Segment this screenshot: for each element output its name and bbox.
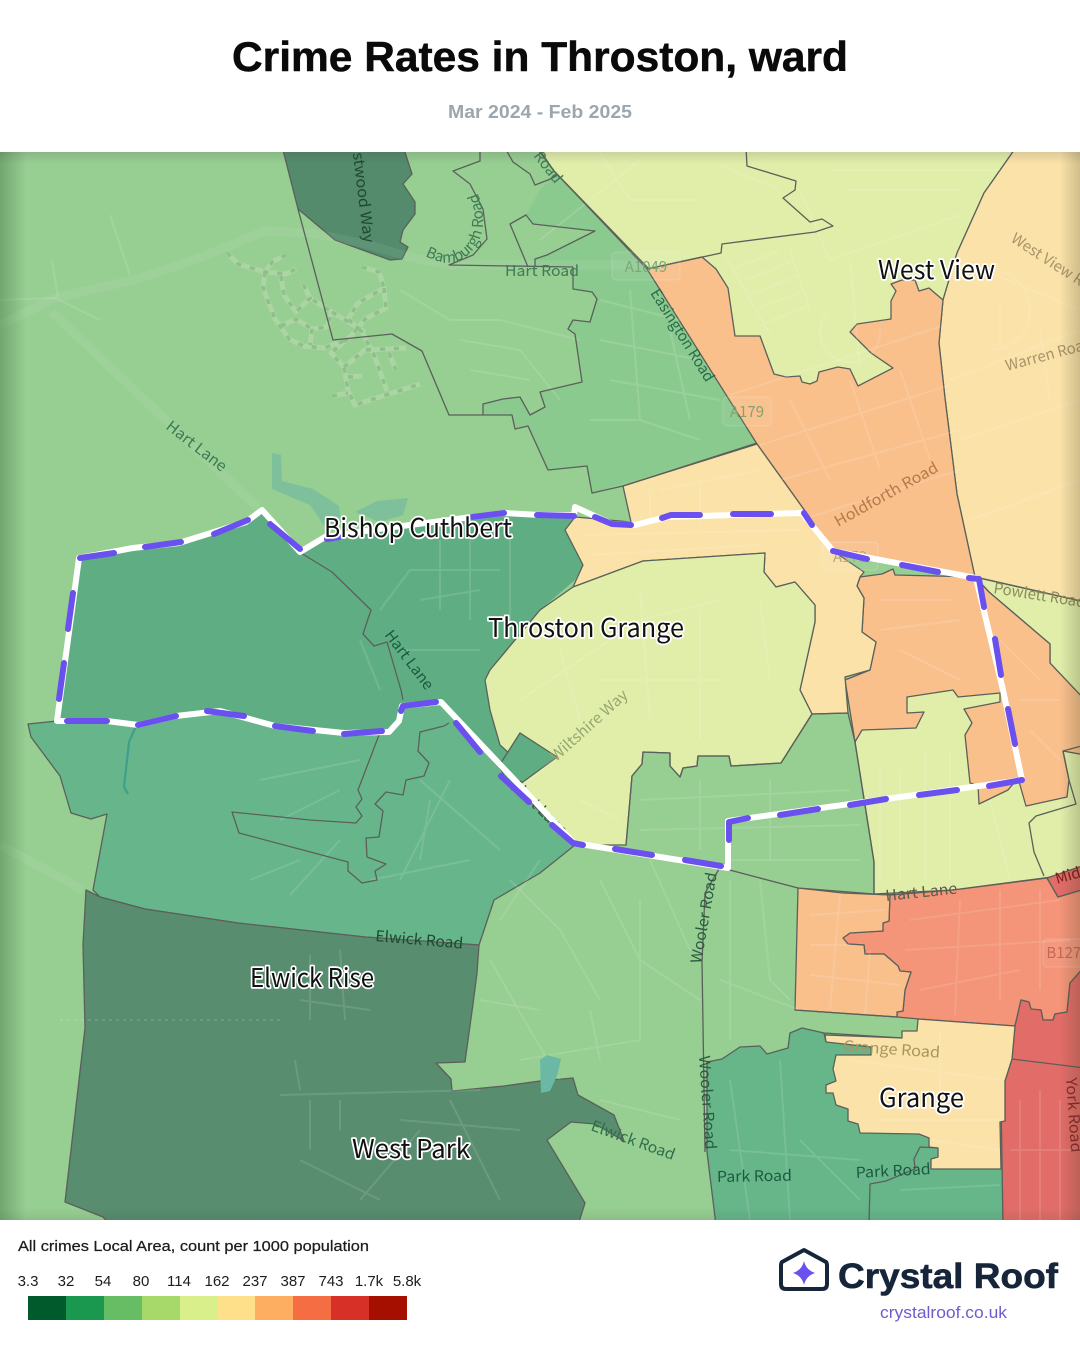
label: Road top: Road <box>529 146 568 187</box>
place: West View: West View <box>878 250 995 287</box>
label: Grange Road: Grange Road <box>843 1035 941 1063</box>
subtitle: date range: Mar 2024 - Feb 2025 <box>448 102 632 122</box>
legend title: All crimes Local Area, count per 1000 population <box>18 1238 369 1255</box>
boundary purple dashes <box>59 513 1022 866</box>
shield A179 north: A179 <box>730 401 764 422</box>
map edge vignette <box>0 152 1080 1220</box>
label: Hart Lane hidden by boundary: Hart Lane <box>508 776 573 840</box>
legend scale values: 1.7k <box>355 1273 384 1290</box>
shield A179 south: A179 <box>833 546 867 567</box>
title: Crime Rates in Throston, ward <box>232 33 848 80</box>
place: Bishop Cuthbert: Bishop Cuthbert <box>324 508 512 545</box>
selected ward boundary: Throston <box>57 507 1022 868</box>
road network <box>0 152 1080 1220</box>
label: Park Road west: Park Road <box>717 1165 792 1187</box>
legend scale values: 387 <box>280 1273 306 1290</box>
legend scale values <box>18 1273 422 1290</box>
place: Grange: Grange <box>879 1078 964 1115</box>
road shields <box>612 252 1080 967</box>
legend <box>18 1238 422 1320</box>
label: Hart Lane ward: Hart Lane <box>380 625 439 694</box>
map base: light green area <box>0 152 948 1220</box>
label: Bamburgh Road: Bamburgh Road <box>426 194 484 263</box>
estate road dashes <box>227 253 420 405</box>
label: Hart Lane east: Hart Lane <box>884 878 958 906</box>
boundary white casing <box>57 507 1022 868</box>
road labels <box>166 152 1080 1182</box>
shield A179 north <box>723 397 771 426</box>
shield A1049 <box>612 252 680 280</box>
shield A1049: A1049 <box>625 256 667 277</box>
second pond <box>355 498 408 522</box>
icon: house with star <box>781 1250 827 1289</box>
crime rate area polygons <box>28 146 1080 1225</box>
housing estate dashed roads <box>227 253 420 405</box>
water: ponds and stream <box>124 453 561 1093</box>
label: Park Road east: Park Road <box>855 1158 931 1183</box>
label: Wooler Road north: Wooler Road <box>685 871 722 965</box>
label: Hart Lane west: Hart Lane <box>162 415 232 476</box>
legend scale values: 743 <box>318 1273 344 1290</box>
logo: Crystal Roof <box>781 1250 1058 1322</box>
legend scale values: 162 <box>204 1273 230 1290</box>
place: Elwick Rise: Elwick Rise <box>250 958 374 995</box>
place names <box>250 250 995 1166</box>
legend scale values: 32 <box>58 1273 74 1290</box>
pond near Elwick Road <box>540 1055 561 1093</box>
pond near Hart Lane <box>272 453 341 525</box>
website url: crystalroof.co.uk <box>880 1304 1008 1322</box>
legend scale values: 237 <box>242 1273 268 1290</box>
extra ward boundaries <box>232 148 1080 1225</box>
label: Hart Road: Hart Road <box>505 260 579 281</box>
legend scale values: 3.3 <box>18 1273 38 1290</box>
label: Elwick Road south: Elwick Road <box>588 1115 678 1165</box>
label: Westwood Way: Westwood Way <box>345 128 380 244</box>
shield B12 <box>1043 939 1080 967</box>
label: Wooler Road south: Wooler Road <box>694 1055 722 1150</box>
legend colour bar <box>28 1296 407 1320</box>
legend scale values: 5.8k <box>393 1273 422 1290</box>
legend scale values: 114 <box>167 1273 191 1290</box>
label: Easington Road: Easington Road <box>646 285 720 386</box>
place: West Park: West Park <box>352 1129 471 1166</box>
estate road casing <box>227 253 420 405</box>
label: Holdforth Road: Holdforth Road <box>830 457 942 531</box>
label: Wiltshire Way: Wiltshire Way <box>545 684 632 766</box>
stream <box>124 726 136 794</box>
logo wordmark: Crystal Roof <box>838 1257 1058 1296</box>
shield A179 south <box>822 542 878 570</box>
place: Throston Grange: Throston Grange <box>488 608 684 645</box>
label: Elwick Road north: Elwick Road <box>375 925 464 954</box>
legend scale values: 80 <box>133 1273 149 1290</box>
legend scale values: 54 <box>95 1273 111 1290</box>
